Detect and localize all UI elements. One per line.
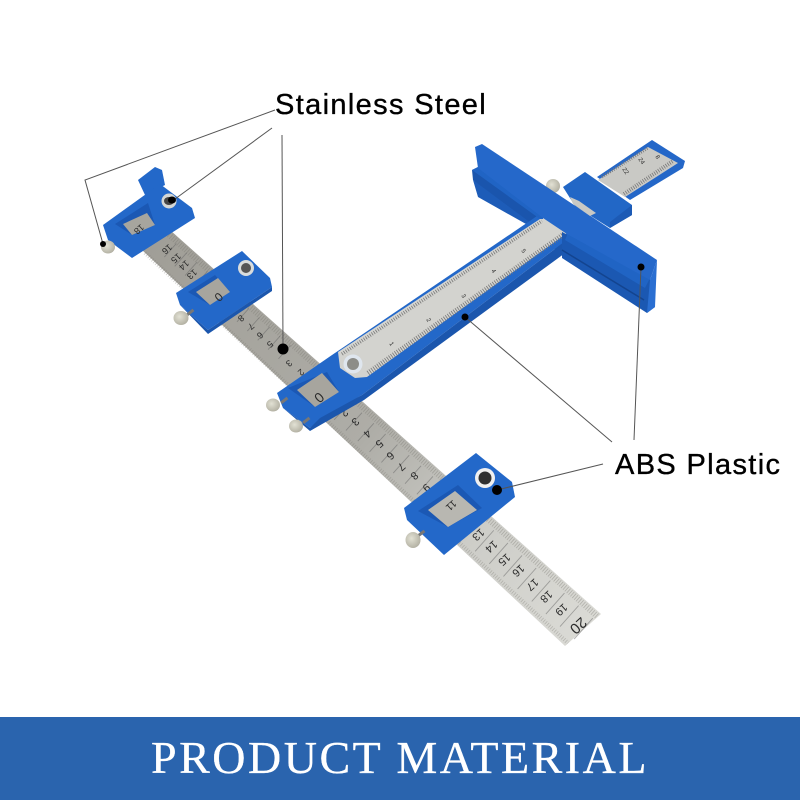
ruler numbers lower: 4 [361,427,373,440]
recess and window [288,372,339,407]
ruler numbers upper: 15 [169,251,183,265]
T-bar with scale: 3 [459,293,467,300]
ruler numbers upper: 3 [284,358,294,369]
ruler numbers lower [338,406,590,637]
ruler numbers upper: 14 [177,258,191,272]
leader lines: ABS plastic [465,267,641,490]
ruler numbers lower: 14 [482,538,500,555]
cross head upper layers [472,144,657,313]
ruler numbers lower: 9 [420,481,432,494]
rear steel scale: 24 [636,157,646,166]
banner: PRODUCT MATERIAL [151,732,649,783]
ruler numbers lower: 15 [495,551,513,568]
slider 1 [101,167,195,258]
T-bar thumb screws [266,397,310,432]
ruler numbers upper: 5 [265,339,275,350]
rear guide block [563,172,632,228]
ruler numbers lower: 19 [552,601,570,618]
ruler numbers lower: 20 [566,613,590,637]
long steel ruler [142,230,601,646]
ruler numbers lower: 5 [373,437,385,450]
ruler numbers lower: 18 [537,588,555,605]
rear steel scale: 8 [653,154,661,161]
banner [0,717,800,800]
ruler numbers lower: 2 [338,406,350,419]
slider 3 [404,453,515,555]
ruler numbers lower: 13 [469,526,487,543]
T-bar with scale [277,214,572,431]
T-bar with scale: 2 [424,317,432,324]
ruler numbers upper: 8 [236,313,246,324]
ruler numbers upper: 6 [255,330,265,341]
leader dots: stainless steel [100,196,288,354]
T-bar with scale: 1 [387,341,395,348]
bar hole [344,354,362,374]
ruler numbers lower: 16 [509,562,527,579]
rear steel scale [597,140,685,200]
ruler numbers lower: 7 [395,460,407,473]
slider 1: 18 [132,222,146,236]
rear steel scale: 22 [620,167,630,176]
label: ABS plastic: ABS Plastic [615,449,781,481]
ruler numbers upper: 16 [160,242,174,256]
rear thumb screw [546,179,560,193]
label: stainless steel: Stainless Steel [275,89,487,121]
slider 2 [174,251,272,334]
slider 3: 11 [443,497,458,513]
silver scale on bar [338,217,567,378]
ruler numbers lower: 3 [349,415,361,428]
ruler numbers lower: 8 [408,469,420,482]
ruler numbers lower: 6 [384,449,396,462]
leader dots: ABS plastic [462,264,644,495]
ruler numbers upper [160,242,306,378]
leader lines: stainless steel [85,110,283,349]
ruler numbers lower: 17 [523,576,541,593]
slider 2: 0 [211,290,226,305]
ruler numbers upper: 7 [246,321,256,332]
T-bar with scale: 4 [489,268,497,275]
cross head lower layers [472,167,570,255]
T-bar with scale: 0 [311,389,328,406]
ruler numbers upper: 2 [296,367,306,378]
ruler numbers upper: 13 [185,267,199,281]
T-bar with scale: 5 [519,248,527,255]
